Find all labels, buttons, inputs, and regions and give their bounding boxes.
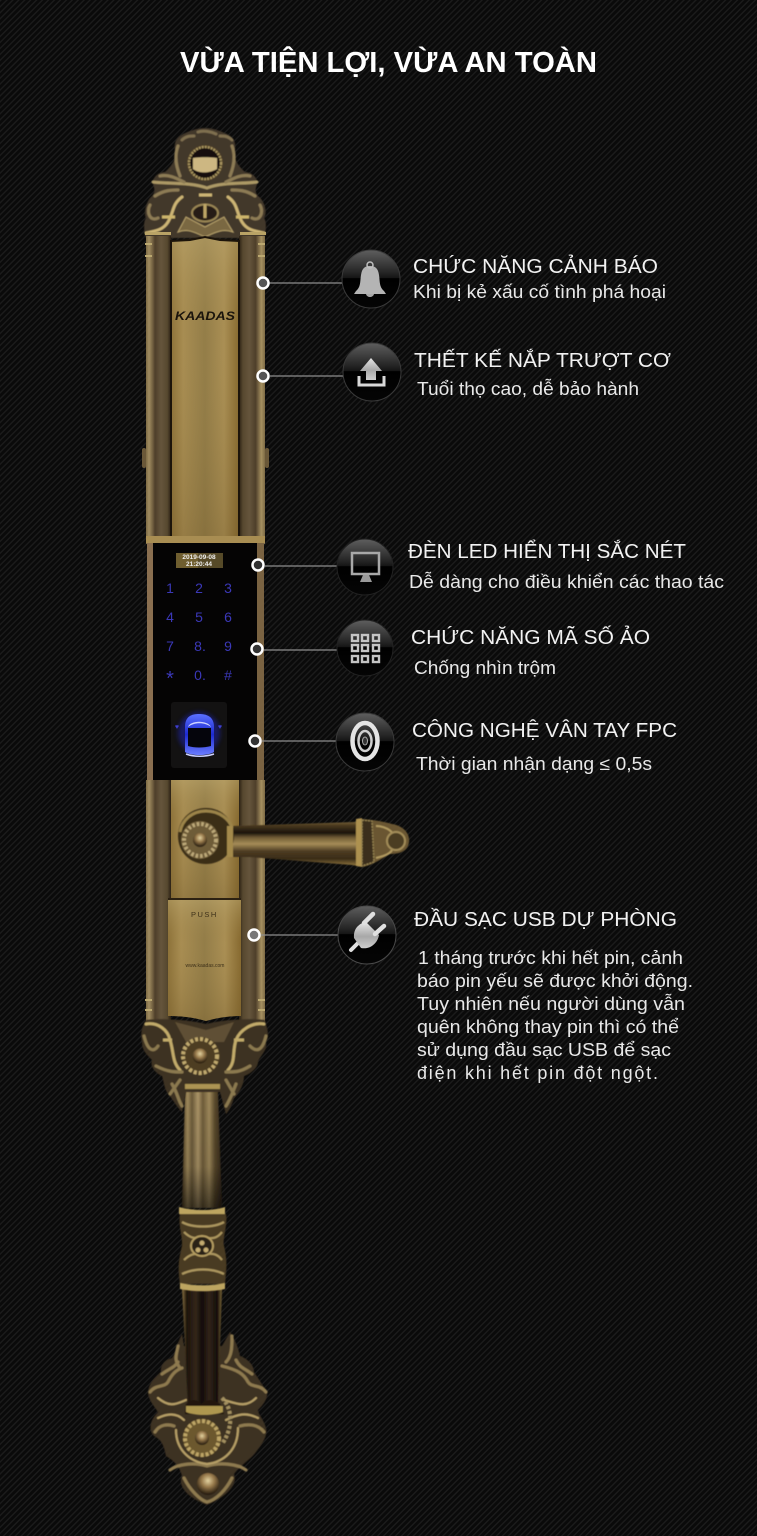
description: USB: điện khi hết pin đột ngột. [417, 1063, 658, 1083]
icon: monitor [337, 539, 393, 595]
lock: keypad panel [147, 543, 264, 780]
heading: LED: ĐÈN LED HIỂN THỊ SẮC NÉT [408, 539, 686, 563]
description: LED: Dễ dàng cho điều khiển các thao tác [409, 571, 724, 592]
heading: sliding cover: THẾT KẾ NẮP TRƯỢT CƠ [414, 348, 671, 372]
LED display: 2019-09-08 [182, 554, 216, 561]
feature: virtual code [337, 620, 650, 678]
marker: fingerprint [250, 736, 336, 746]
marker: LED [252, 560, 338, 570]
heading: USB: ĐẦU SẠC USB DỰ PHÒNG [414, 908, 677, 931]
lock: pull handle shaft [182, 1090, 224, 1415]
lock: handle collar [179, 1207, 226, 1291]
keypad digits: 4 [166, 609, 174, 625]
icon: fingerprint rings [336, 713, 394, 771]
icon: bell [342, 250, 400, 308]
keypad digits: 6 [224, 609, 232, 625]
description: fingerprint: Thời gian nhận dạng ≤ 0,5s [416, 754, 652, 774]
description: USB: báo pin yếu sẽ được khởi động. [417, 971, 693, 991]
fingerprint sensor: ♥ [175, 724, 179, 731]
icon: plug [338, 906, 396, 964]
keypad digits: # [224, 667, 232, 683]
marker: virtual code [252, 644, 337, 654]
marker: alarm [258, 278, 342, 288]
connector lines and markers [248, 278, 343, 940]
keypad digits [166, 580, 232, 690]
lock: lower rails and panels [145, 780, 265, 1022]
keypad digits: 8. [194, 638, 206, 654]
description: sliding cover: Tuổi thọ cao, dễ bảo hành [417, 378, 639, 399]
keypad digits: 0. [194, 667, 206, 683]
keypad digits: 5 [195, 609, 203, 625]
brand wordmark: KAADAS [175, 309, 235, 323]
icon: upload [343, 343, 401, 401]
heading: fingerprint: CÔNG NGHỆ VÂN TAY FPC [412, 719, 677, 742]
fingerprint sensor: ♥ [218, 724, 222, 731]
heading: virtual code: CHỨC NĂNG MÃ SỐ ẢO [411, 625, 650, 649]
lock: top crest [144, 128, 266, 238]
door lock product [141, 128, 409, 1505]
title: VỪA TIỆN LỢI, VỪA AN TOÀN [180, 45, 597, 79]
feature: sliding cover [343, 343, 671, 401]
description: alarm: Khi bị kẻ xấu cố tình phá hoại [413, 282, 666, 302]
description: USB [417, 948, 693, 1083]
marker: sliding cover [258, 370, 343, 382]
lock: bottom plate crest [141, 1019, 268, 1114]
heading: alarm: CHỨC NĂNG CẢNH BÁO [413, 255, 658, 278]
keypad digits: 2 [195, 580, 203, 596]
LED display: 21:20:44 [186, 561, 212, 568]
push label: PUSH [191, 910, 218, 919]
fingerprint sensor [171, 702, 227, 768]
keypad digits: 9 [224, 638, 232, 654]
marker: USB [248, 930, 339, 940]
description: USB: sử dụng đầu sạc USB để sạc [417, 1040, 671, 1060]
description: USB: quên không thay pin thì có thể [417, 1017, 679, 1037]
lock: lever handle [178, 808, 409, 867]
description: USB: Tuy nhiên nếu người dùng vẫn [417, 993, 685, 1014]
lock: bottom rosette [148, 1332, 267, 1505]
feature: USB [338, 906, 693, 1083]
feature: alarm [342, 250, 666, 308]
description: virtual code: Chống nhìn trộm [414, 658, 556, 678]
keypad digits: 7 [166, 638, 174, 654]
feature: LED [337, 539, 724, 595]
description: USB: 1 tháng trước khi hết pin, cảnh [418, 948, 683, 968]
keypad digits: * [166, 668, 174, 690]
website label: www.kaadas.com [186, 963, 224, 969]
keypad digits: 3 [224, 580, 232, 596]
icon: keypad grid [337, 620, 393, 676]
keypad digits: 1 [166, 580, 174, 596]
LED display [176, 553, 223, 568]
lock: upper rails and panel [142, 232, 269, 544]
feature: fingerprint [336, 713, 677, 774]
